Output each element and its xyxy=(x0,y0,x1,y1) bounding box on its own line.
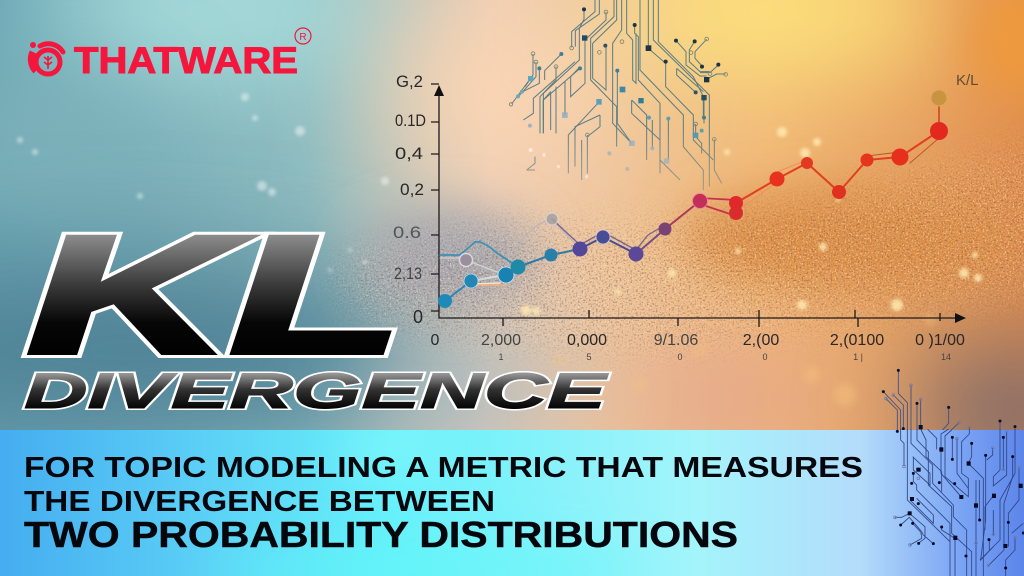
y axis labels: 0.1D xyxy=(395,111,426,130)
x axis sub labels: 14 xyxy=(941,352,951,362)
registered mark: R xyxy=(299,32,307,43)
x axis labels: 0 xyxy=(431,332,440,349)
bottom caption band xyxy=(0,425,1024,576)
title: KL xyxy=(28,203,402,388)
title: KL: KL xyxy=(28,203,402,388)
y axis labels: 0.6 xyxy=(393,223,421,242)
title: DIVERGENCE: DIVERGENCE xyxy=(24,363,609,419)
x axis sub labels: 0 xyxy=(677,352,683,362)
title: DIVERGENCE xyxy=(24,363,609,419)
title: DIVERGENCE: DIVERGENCE xyxy=(24,363,609,419)
title: KL: KL xyxy=(28,203,402,388)
x axis arrow xyxy=(955,313,966,323)
background: granular sand texture xyxy=(323,131,1024,368)
line chart xyxy=(393,72,979,362)
y axis labels: G,2 xyxy=(396,72,423,91)
circuit traces: lower right, over caption band xyxy=(894,429,1024,576)
main series line xyxy=(445,98,939,301)
logo wordmark: THATWARE xyxy=(74,40,298,81)
background: bokeh light spots xyxy=(17,93,982,406)
x axis sub labels: 0 xyxy=(762,352,768,362)
y axis labels: 0,2 xyxy=(400,180,424,199)
caption line 1: FOR TOPIC MODELING A METRIC THAT MEASURES xyxy=(24,452,863,484)
x axis labels xyxy=(431,332,965,349)
x axis labels: 2,000 xyxy=(481,332,521,349)
y axis labels: 0,4 xyxy=(395,144,423,163)
x axis labels: 0,000 xyxy=(567,332,607,349)
caption line 2: THE DIVERGENCE BETWEEN xyxy=(24,486,495,518)
registered mark xyxy=(295,28,311,44)
x axis sub labels: 1 xyxy=(498,352,504,362)
y axis labels xyxy=(393,72,426,327)
series label K/L: K/L xyxy=(956,72,979,89)
x axis sub labels: 5 xyxy=(586,352,592,362)
chart axes xyxy=(431,84,958,327)
logo: THATWARE xyxy=(30,28,311,81)
circuit traces: lower right xyxy=(882,369,1016,576)
y axis labels: 2,13 xyxy=(394,264,422,283)
logo icon xyxy=(30,42,63,74)
x axis labels: 2,(0100 xyxy=(830,332,884,349)
y axis labels: 0 xyxy=(413,307,423,327)
caption text xyxy=(24,452,863,555)
data points xyxy=(438,90,948,308)
x axis labels: 2,(00 xyxy=(743,332,779,349)
secondary faded series xyxy=(440,138,939,285)
x axis labels: 9/1.06 xyxy=(654,332,698,349)
x axis sub labels xyxy=(498,352,951,362)
x axis labels: 0 )1/00 xyxy=(915,332,965,349)
caption line 3: TWO PROBABILITY DISTRIBUTIONS xyxy=(24,514,738,555)
circuit traces: top centre xyxy=(509,0,727,190)
x axis sub labels: 1 | xyxy=(853,352,863,362)
y axis arrow xyxy=(434,85,444,96)
